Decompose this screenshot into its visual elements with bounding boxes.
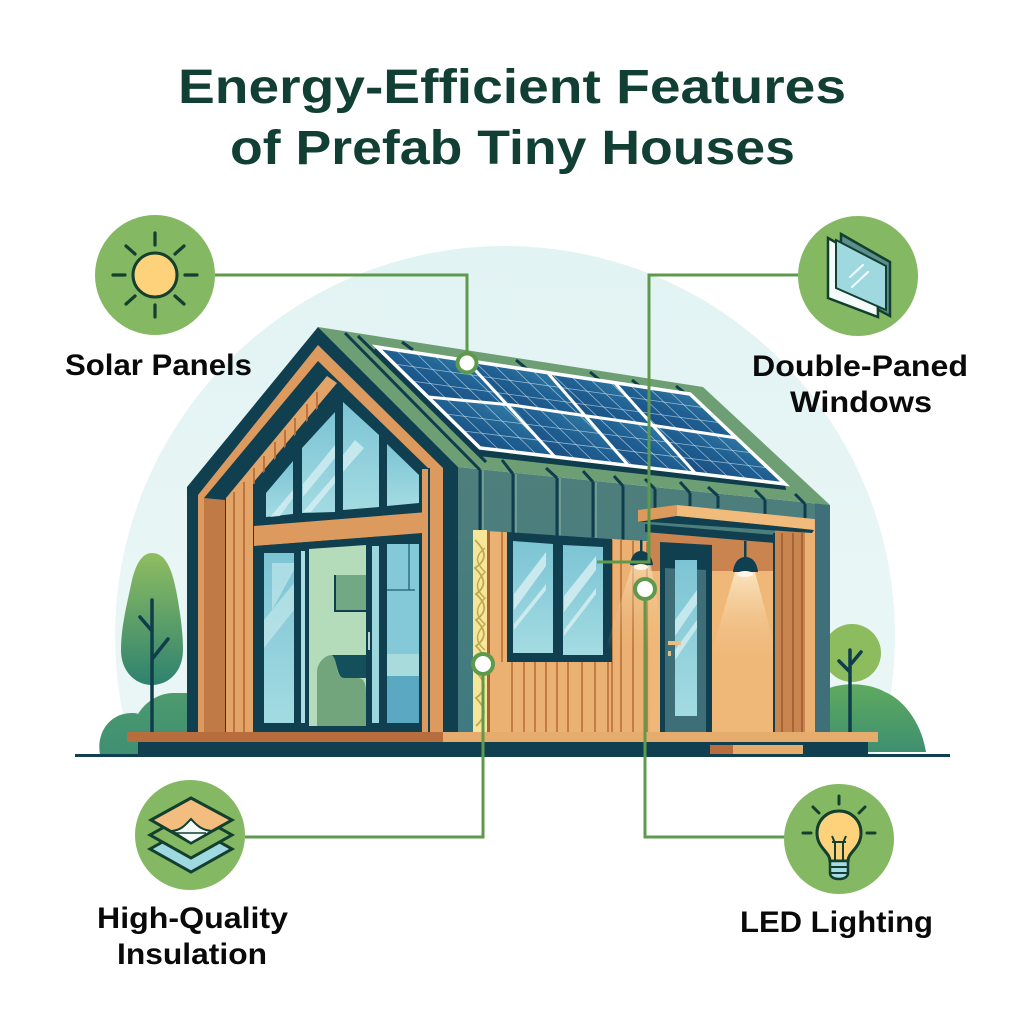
wood beam bbox=[254, 512, 428, 546]
deck bbox=[127, 732, 878, 755]
lower window frame bbox=[255, 533, 422, 732]
side wall bbox=[458, 467, 830, 732]
house bbox=[127, 327, 878, 755]
entry step bbox=[710, 745, 803, 754]
wall seams bbox=[480, 470, 805, 540]
roof bbox=[318, 327, 830, 505]
insulation strip bbox=[473, 530, 487, 732]
lamp light left bbox=[605, 566, 666, 650]
callout: windows bbox=[597, 275, 800, 562]
ground line bbox=[75, 754, 950, 757]
solar array bbox=[377, 347, 785, 484]
label: double-paned windows bbox=[752, 350, 968, 419]
icon: insulation layers bbox=[135, 780, 245, 890]
left tree and bushes bbox=[99, 553, 200, 755]
roof stripes bbox=[345, 333, 486, 470]
porch bbox=[605, 505, 815, 732]
right tree and bushes bbox=[823, 624, 926, 752]
porch post bbox=[774, 519, 815, 732]
icon: LED bulb bbox=[784, 784, 894, 894]
upper glass panes bbox=[266, 402, 419, 517]
upper window frame bbox=[255, 382, 422, 525]
callout: solar panels bbox=[215, 275, 476, 372]
lower window panes bbox=[264, 544, 419, 726]
porch back wall bbox=[648, 530, 775, 732]
lamp right bbox=[733, 541, 758, 577]
porch canopy bbox=[638, 505, 814, 543]
gable outer frame bbox=[187, 327, 458, 732]
title bbox=[178, 61, 846, 175]
panel shadow bbox=[372, 347, 786, 490]
background circle bbox=[115, 246, 895, 754]
label: solar panels: Solar Panels bbox=[65, 349, 252, 382]
label: double-paned windows: Double-Paned bbox=[752, 350, 968, 383]
label: insulation bbox=[97, 902, 288, 971]
icon: double-paned window bbox=[798, 216, 918, 336]
label: double-paned windows: Windows bbox=[790, 386, 932, 419]
wall end strip bbox=[815, 503, 830, 732]
label: LED lighting: LED Lighting bbox=[740, 906, 933, 939]
title: of Prefab Tiny Houses bbox=[230, 122, 795, 175]
gable inner frame bbox=[204, 361, 428, 732]
label: insulation: Insulation bbox=[117, 938, 267, 971]
icon: sun bbox=[95, 215, 215, 335]
side window bbox=[507, 532, 612, 662]
infographic bbox=[66, 68, 966, 964]
wood wall bbox=[487, 531, 660, 732]
porch door bbox=[660, 542, 712, 732]
callout: insulation bbox=[245, 654, 493, 837]
lamp left bbox=[630, 540, 653, 570]
lamp light right bbox=[713, 572, 773, 668]
label: insulation: High-Quality bbox=[97, 902, 288, 935]
gable left wood post bbox=[204, 498, 225, 732]
title: Energy-Efficient Features bbox=[178, 61, 846, 114]
gable wood trim bbox=[198, 345, 443, 732]
callout: LED lighting bbox=[635, 579, 785, 837]
